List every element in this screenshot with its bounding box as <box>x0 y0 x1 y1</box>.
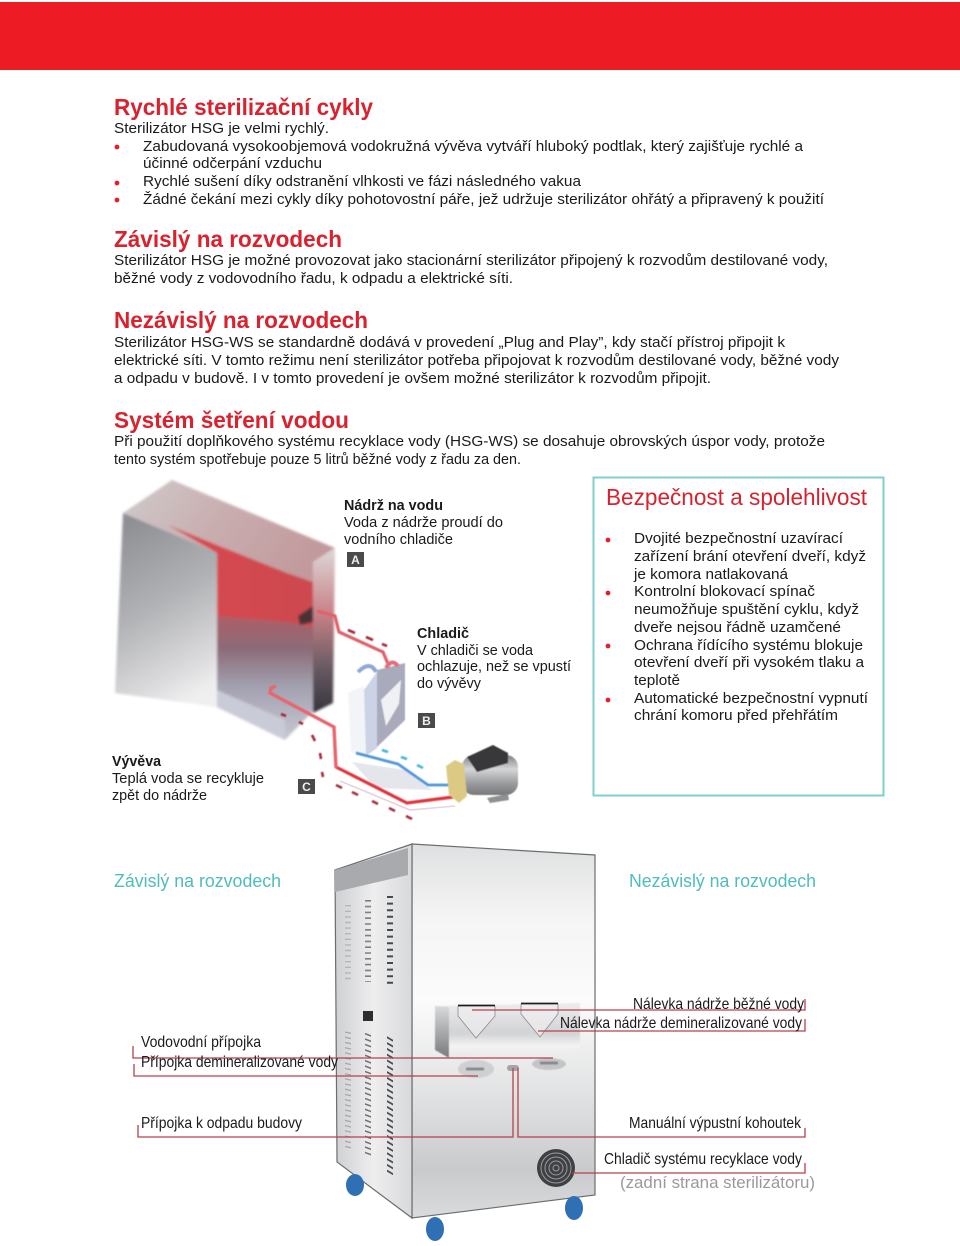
labels: left connections: Přípojka k odpadu budovy <box>141 1115 302 1132</box>
note: rear side: (zadní strana sterilizátoru) <box>620 1174 815 1192</box>
item 3 <box>606 638 864 689</box>
flow dashes <box>281 630 423 819</box>
heading: Systém šetření vodou <box>114 407 349 433</box>
paragraph <box>114 253 828 287</box>
intro text: Sterilizátor HSG je velmi rychlý. <box>114 121 329 137</box>
side vents <box>348 896 390 1174</box>
paragraph: běžné vody z vodovodního řadu, k odpadu a elektrické síti. <box>114 271 513 287</box>
wheels <box>346 1174 583 1241</box>
panel: Bezpečnost a spolehlivost <box>594 478 884 796</box>
item 2: neumožňuje spuštění cyklu, když <box>634 602 859 618</box>
paragraph: Sterilizátor HSG je možné provozovat jako stacionární sterilizátor připojený k rozvodům destilované vody, <box>114 253 828 269</box>
label: Nádrž na vodu: vodního chladiče <box>344 532 453 548</box>
label: Nádrž na vodu <box>344 498 503 548</box>
connectors <box>458 1058 566 1078</box>
drain valve <box>507 1065 519 1071</box>
item 4: chrání komoru před přehřátím <box>634 708 838 724</box>
label: Vývěva: Vývěva <box>112 754 162 770</box>
funnel: demineralizovaná voda <box>521 1004 558 1037</box>
label: Chladič: V chladiči se voda <box>417 643 533 659</box>
label: Chladič: do vývěvy <box>417 676 482 692</box>
item 4: Automatické bezpečnostní vypnutí <box>634 691 868 707</box>
side face <box>335 844 412 1218</box>
section: Systém šetření vodou <box>114 407 825 468</box>
badge B <box>418 713 435 728</box>
item 1: zařízení brání otevření dveří, když <box>634 549 866 565</box>
label: Nádrž na vodu: Voda z nádrže proudí do <box>344 515 503 531</box>
item 2: Kontrolní blokovací spínač <box>634 584 815 600</box>
bullet list: účinné odčerpání vzduchu <box>143 156 322 172</box>
caption: Závislý na rozvodech: Závislý na rozvodech <box>114 871 281 891</box>
paragraph: Při použití doplňkového systému recyklace vody (HSG-WS) se dosahuje obrovských úspor vody, protože <box>114 434 825 450</box>
top band <box>335 848 408 892</box>
illustration: water recycling system <box>112 480 571 819</box>
paragraph: Sterilizátor HSG-WS se standardně dodává v provedení „Plug and Play”, kdy stačí přístroj připojit k <box>114 335 786 351</box>
badge A: A <box>351 553 360 567</box>
labels: right connections: Chladič systému recyklace vody <box>604 1151 802 1168</box>
label: Chladič: Chladič <box>417 626 469 642</box>
labels: left connections: Vodovodní přípojka <box>141 1034 261 1051</box>
label: Chladič <box>417 626 571 692</box>
leader lines <box>133 999 805 1173</box>
section: Závislý na rozvodech <box>114 226 828 287</box>
badge A <box>347 552 364 567</box>
pump motor <box>446 745 518 803</box>
paragraph <box>114 434 825 468</box>
paragraph: tento systém spotřebuje pouze 5 litrů běžné vody z řadu za den. <box>114 452 521 468</box>
badge C: C <box>302 780 311 794</box>
section: Rychlé sterilizační cykly <box>114 94 824 208</box>
bullet list: Žádné čekání mezi cykly díky pohotovostní páře, jež udržuje sterilizátor ohřátý a připravený k použití <box>143 191 824 208</box>
header red bar <box>0 2 960 70</box>
item 2: dveře nejsou řádně uzamčené <box>634 620 841 636</box>
cooling fan <box>537 1149 575 1187</box>
item 1 <box>606 531 866 583</box>
pipe: cooler to pump (blue) <box>356 753 450 785</box>
funnel: běžná voda <box>458 1006 495 1038</box>
label: Chladič: ochlazuje, než se vpustí <box>417 659 571 675</box>
panel heading: Bezpečnost a spolehlivost <box>606 484 868 510</box>
bullet list: Rychlé sušení díky odstranění vlhkosti ve fázi následného vakua <box>143 174 581 190</box>
item 3: otevření dveří při vysokém tlaku a <box>634 655 864 671</box>
label: Vývěva <box>112 754 264 804</box>
illustration: sterilizer cabinet <box>335 844 595 1241</box>
return line <box>340 781 455 810</box>
item 3: teplotě <box>634 673 680 689</box>
recessed panel <box>435 1003 580 1058</box>
label: Vývěva: Teplá voda se recykluje <box>112 771 264 787</box>
labels: right connections: Manuální výpustní kohoutek <box>629 1115 802 1132</box>
bullet list: Zabudovaná vysokoobjemová vodokružná vývěva vytváří hluboký podtlak, který zajišťuje rychlé a <box>143 139 803 155</box>
bullet list <box>115 139 824 208</box>
panel border <box>594 478 884 796</box>
badge C <box>298 779 315 794</box>
label: Vývěva: zpět do nádrže <box>112 788 207 804</box>
paragraph <box>114 335 840 387</box>
control square <box>363 1011 373 1021</box>
labels: right connections: Nálevka nádrže demineralizované vody <box>560 1015 802 1032</box>
badge B: B <box>422 714 431 728</box>
labels: right connections: Nálevka nádrže běžné vody <box>633 996 804 1013</box>
item 2 <box>606 584 859 636</box>
label: Nádrž na vodu: Nádrž na vodu <box>344 498 443 514</box>
section: Nezávislý na rozvodech <box>114 307 840 387</box>
item 1: Dvojité bezpečnostní uzavírací <box>634 531 843 547</box>
heading: Rychlé sterilizační cykly <box>114 94 373 120</box>
labels: left connections: Přípojka demineralizované vody <box>141 1054 338 1071</box>
item 3: Ochrana řídícího systému blokuje <box>634 638 863 654</box>
paragraph: elektrické síti. V tomto režimu není sterilizátor potřeba připojovat k rozvodům destilované vody, běžné vody <box>114 353 840 369</box>
labels: left connections <box>141 1034 338 1132</box>
cooler <box>348 662 432 790</box>
item 1: je komora natlakovaná <box>633 567 788 583</box>
pipe: pump to tank (red) <box>270 686 453 803</box>
heading: Nezávislý na rozvodech <box>114 307 368 333</box>
item 4 <box>606 691 868 724</box>
pipe: tank to cooler <box>317 611 388 664</box>
labels: right connections <box>560 996 804 1168</box>
tank <box>115 480 335 740</box>
heading: Závislý na rozvodech <box>114 226 342 252</box>
caption: Nezávislý na rozvodech: Nezávislý na rozvodech <box>629 871 816 891</box>
paragraph: a odpadu v budově. I v tomto provedení je ovšem možné sterilizátor k rozvodům připojit. <box>114 371 711 387</box>
front face <box>412 844 595 1218</box>
